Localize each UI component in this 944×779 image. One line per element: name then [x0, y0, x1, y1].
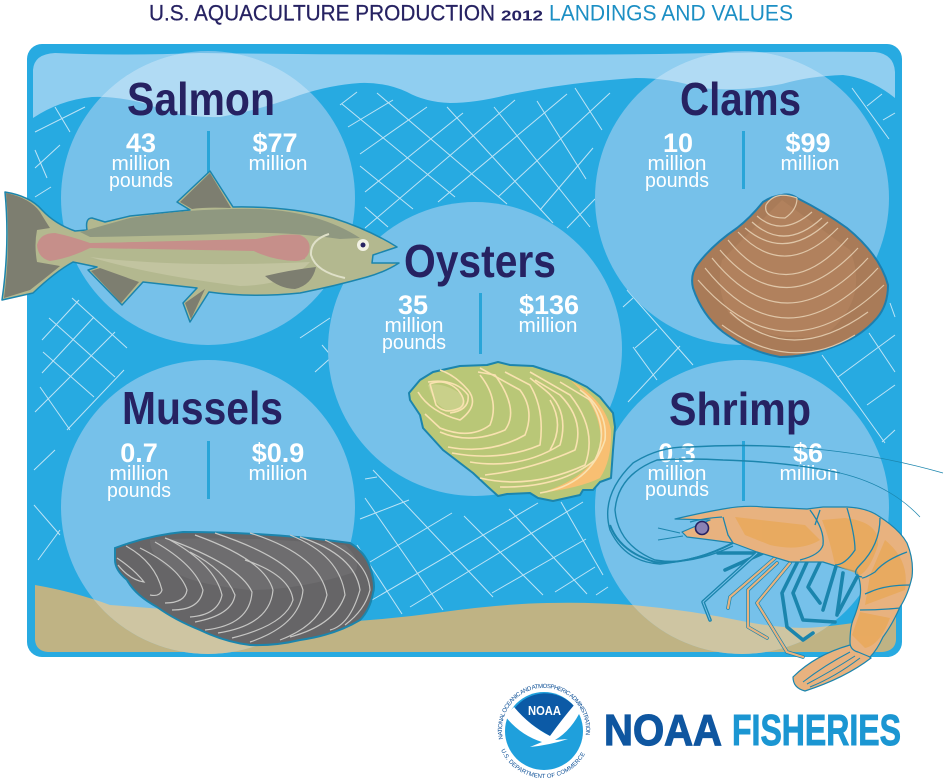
pectoral fin	[265, 267, 316, 289]
body shading	[735, 517, 906, 648]
panel: ocean background	[27, 44, 902, 657]
segment lines	[690, 508, 910, 610]
emblem wordmark: NOAA	[528, 703, 562, 718]
heading: Mussels: Mussels	[122, 382, 283, 434]
stats: shrimp: million	[780, 463, 838, 485]
stats: shrimp: 0.3	[658, 438, 696, 468]
stats: oysters: pounds	[382, 332, 446, 354]
body	[675, 506, 912, 657]
icon: mussel	[115, 532, 374, 645]
stats: clams: pounds	[645, 170, 709, 192]
panel: oysters	[328, 202, 622, 496]
stats: oysters: 35	[398, 290, 428, 320]
stats: salmon: million	[112, 153, 170, 175]
gill line	[311, 234, 345, 278]
icon: salmon	[2, 171, 399, 322]
emblem ring text	[498, 684, 590, 778]
panel: clams	[595, 51, 889, 345]
emblem ring text: NATIONAL OCEANIC AND ATMOSPHERIC ADMINISTRATION	[498, 684, 590, 740]
heading: Salmon: Salmon	[127, 73, 275, 125]
stats: salmon: 43	[126, 128, 156, 158]
panel: salmon	[61, 51, 355, 345]
eye	[696, 522, 708, 534]
icon: clam	[692, 194, 888, 357]
stats: mussels: million	[110, 463, 168, 485]
title: 2012	[501, 8, 543, 24]
stats: oysters: million	[518, 315, 578, 337]
stats: salmon: $77	[252, 128, 298, 158]
net pattern	[34, 88, 895, 614]
ventral fin	[185, 289, 205, 319]
stats: clams: million	[648, 153, 706, 175]
stats: salmon: million	[248, 153, 308, 175]
stats: mussels: pounds	[107, 480, 171, 502]
belly shading	[90, 257, 310, 286]
heading: Oysters: Oysters	[404, 235, 556, 287]
icon: oyster	[409, 362, 615, 501]
title: LANDINGS AND VALUES	[549, 0, 793, 26]
stats: shrimp: $6	[793, 438, 823, 468]
heading: Shrimp: Shrimp	[669, 383, 811, 435]
back shading	[80, 209, 360, 239]
stats: clams: 10	[663, 128, 693, 158]
anal fin	[91, 268, 139, 303]
whiskers	[658, 528, 683, 540]
tail fan	[793, 645, 871, 691]
stats: shrimp: million	[648, 463, 706, 485]
logo: NOAA emblem	[498, 684, 590, 778]
pink lateral stripe	[37, 233, 305, 261]
water surface	[33, 52, 895, 118]
stats: mussels: 0.7	[120, 438, 158, 468]
title: U.S. AQUACULTURE PRODUCTION	[149, 0, 495, 26]
stats: clams: $99	[785, 128, 831, 158]
icon: shrimp	[608, 446, 943, 691]
stats: mussels: million	[248, 463, 308, 485]
title	[149, 0, 793, 26]
stats: shrimp: pounds	[645, 479, 709, 501]
stats: clams	[645, 128, 840, 192]
antennae	[608, 446, 943, 564]
panel: mussels	[61, 360, 355, 654]
stats: salmon	[109, 128, 308, 192]
legs	[703, 553, 857, 657]
stats: mussels: $0.9	[252, 438, 304, 468]
stats: salmon: pounds	[109, 170, 173, 192]
stats: oysters: $136	[519, 290, 579, 320]
stats: oysters: million	[384, 315, 444, 337]
stats: oysters	[382, 290, 579, 354]
tail fin	[4, 193, 60, 298]
eye	[357, 239, 369, 251]
stats: clams: million	[780, 153, 840, 175]
logo: NOAA Fisheries wordmark: NOAA	[604, 706, 722, 755]
stats: shrimp	[645, 438, 838, 501]
stats: mussels	[107, 438, 308, 502]
sea floor	[35, 585, 896, 652]
panel: shrimp	[595, 360, 889, 654]
dorsal fin	[180, 173, 231, 209]
emblem dark sky	[514, 693, 574, 736]
emblem gull	[505, 704, 582, 747]
heading: Clams: Clams	[680, 73, 801, 125]
logo: NOAA Fisheries wordmark	[604, 706, 901, 755]
